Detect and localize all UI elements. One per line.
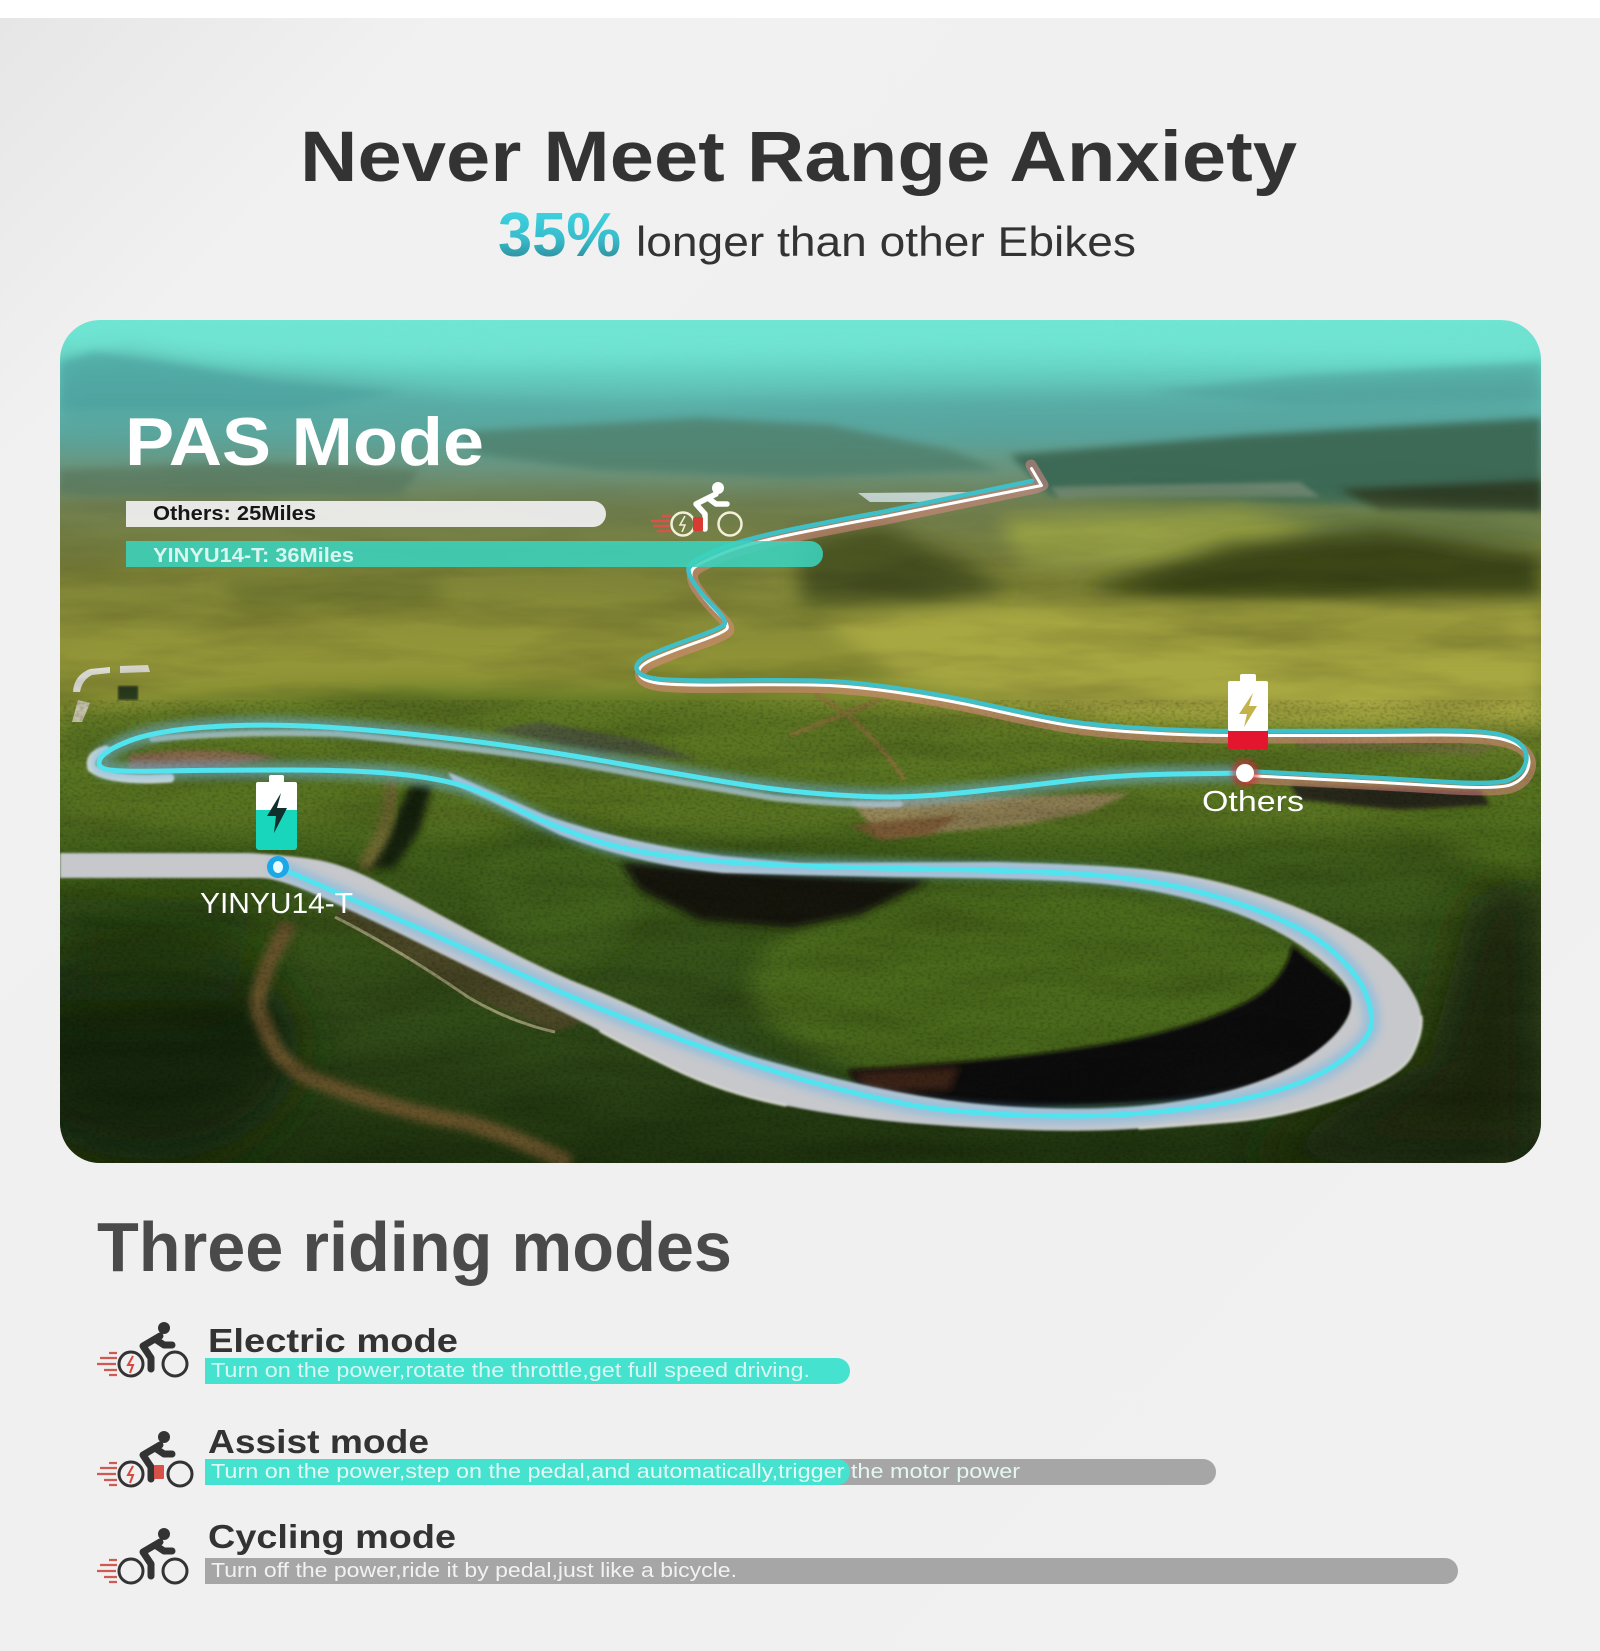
label: Others: Others — [1202, 786, 1304, 818]
battery: YINYU14-T half charged — [256, 775, 297, 850]
panel: Cycling mode — [97, 1518, 1458, 1584]
bar: Others 25 miles: Others: 25Miles — [153, 503, 316, 525]
subtitle: longer than other Ebikes — [636, 218, 1136, 265]
marker: YINYU14-T position — [267, 856, 289, 878]
label: YINYU14-T: YINYU14-T — [200, 888, 353, 920]
description bar: Turn on the power,rotate the throttle,get full speed driving. — [211, 1360, 810, 1382]
icon: assist cyclist — [97, 1431, 192, 1486]
description bar — [205, 1358, 850, 1384]
heading: Three riding modes: Three riding modes — [97, 1208, 732, 1286]
panel: Assist mode — [97, 1423, 1216, 1486]
subtitle: 35% — [498, 201, 621, 270]
landscape terrain — [0, 320, 1541, 1163]
label: Cycling mode — [208, 1518, 456, 1555]
route line: YINYU14-T range — [99, 725, 1372, 1116]
subtitle — [498, 201, 1136, 270]
route line: shared section with Others — [636, 465, 1531, 790]
bar: Others 25 miles — [126, 501, 606, 527]
battery: Others nearly empty — [1228, 674, 1268, 749]
description bar: Turn off the power,ride it by pedal,just like a bicycle. — [211, 1560, 737, 1582]
panel: PAS mode landscape photo — [0, 320, 1541, 1163]
label: Electric mode — [208, 1322, 458, 1359]
title: Never Meet Range Anxiety — [300, 118, 1298, 197]
icon: white cyclist on route — [651, 482, 742, 536]
bar: YINYU14-T 36 miles — [126, 541, 823, 567]
road surface — [60, 733, 1422, 1131]
panel: Electric mode — [97, 1322, 850, 1384]
label: Assist mode — [208, 1423, 429, 1460]
description bar — [205, 1558, 1458, 1584]
icon: pedal cyclist — [97, 1528, 187, 1583]
description bar — [205, 1459, 1216, 1485]
description bar: Turn on the power,step on the pedal,and automatically,trigger the motor power — [211, 1461, 1020, 1483]
icon: electric cyclist — [97, 1322, 187, 1376]
bar: YINYU14-T 36 miles: YINYU14-T: 36Miles — [153, 545, 354, 567]
heading: PAS Mode: PAS Mode — [125, 404, 484, 480]
marker: Others position — [1231, 759, 1259, 787]
